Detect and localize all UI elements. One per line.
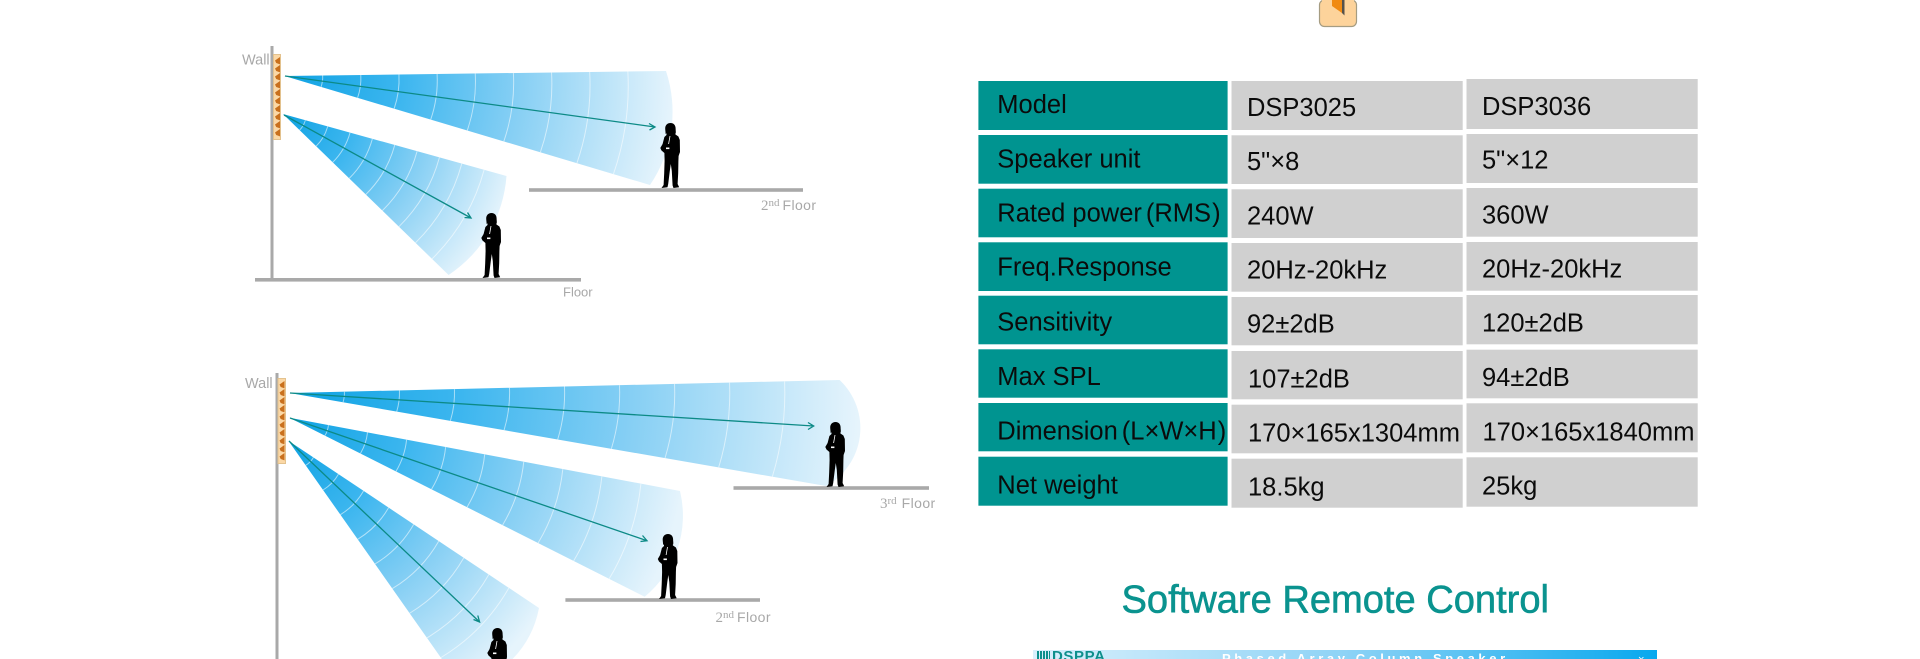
- row: dimension: Dimension(L×W×H): [997, 418, 1226, 446]
- row: frequency response: Freq.Response: [997, 254, 1172, 282]
- row: max SPL: [978, 349, 1698, 399]
- row: sensitivity: 92±2dB: [1247, 310, 1335, 338]
- floor line: [255, 278, 581, 282]
- second floor line: [529, 188, 803, 192]
- row: dimension: [978, 403, 1698, 453]
- row: frequency response: 20Hz-20kHz: [1482, 255, 1622, 283]
- row: model: Model: [997, 91, 1067, 119]
- row: rated power: 240W: [1247, 203, 1314, 231]
- label: 3rd floor: 3: [880, 496, 888, 512]
- label: 3rd floor: Floor: [902, 495, 936, 511]
- beam to second floor: [284, 71, 673, 185]
- beam to floor: [283, 114, 506, 275]
- wall line: [270, 46, 274, 280]
- label: 2nd floor: Floor: [782, 197, 816, 213]
- second floor line: [565, 598, 760, 602]
- beam to third floor: [289, 380, 860, 486]
- speaker column: [274, 54, 280, 140]
- row: rated power: Rated power(RMS): [997, 200, 1221, 228]
- logo dots: [1037, 651, 1050, 659]
- row: dimension: 170×165x1840mm: [1482, 419, 1694, 447]
- person on second floor: [658, 534, 678, 599]
- beam to floor: [288, 441, 539, 659]
- row: net weight: 18.5kg: [1248, 474, 1325, 502]
- label: wall: Wall: [245, 376, 273, 392]
- person on floor: [481, 213, 501, 278]
- label: floor: Floor: [563, 284, 593, 300]
- label: wall: Wall: [242, 52, 270, 68]
- person on floor, cut off by the page edge: [487, 628, 507, 659]
- person on second floor: [660, 123, 680, 188]
- row: net weight: 25kg: [1482, 472, 1537, 500]
- label: 2nd floor: Floor: [737, 609, 771, 625]
- diagram: two-floor coverage: [242, 46, 816, 300]
- wall line: [276, 373, 278, 659]
- diagram: three-floor coverage: [245, 373, 936, 659]
- row: speaker unit: 5"×8: [1247, 148, 1299, 176]
- person on third floor: [825, 422, 845, 487]
- row: sensitivity: Sensitivity: [997, 308, 1112, 336]
- software window title bar: [1033, 650, 1657, 659]
- row: max SPL: 94±2dB: [1482, 364, 1570, 392]
- label: 3rd floor: rd: [888, 495, 897, 507]
- row: max SPL: Max SPL: [997, 363, 1101, 391]
- row: rated power: [978, 188, 1698, 238]
- row: model: [978, 79, 1698, 130]
- row: sensitivity: 120±2dB: [1482, 310, 1584, 338]
- row: speaker unit: Speaker unit: [997, 146, 1140, 174]
- row: dimension: 170×165x1304mm: [1248, 420, 1460, 448]
- row: frequency response: [978, 242, 1698, 292]
- beam to second floor: [289, 418, 683, 597]
- label: 2nd floor: nd: [723, 609, 734, 621]
- icon: speaker: [1320, 0, 1356, 26]
- label: 2nd floor: 2: [761, 198, 768, 214]
- title: software remote control: Software Remote Control: [1122, 579, 1549, 622]
- row: net weight: [978, 457, 1698, 508]
- row: rated power: 360W: [1482, 201, 1549, 229]
- row: net weight: Net weight: [997, 471, 1118, 499]
- label: 2nd floor: 2: [716, 610, 723, 626]
- label: 2nd floor: nd: [768, 197, 780, 209]
- row: speaker unit: [978, 134, 1698, 184]
- row: sensitivity: [978, 295, 1698, 345]
- specification table: [978, 79, 1698, 508]
- row: model: DSP3036: [1482, 93, 1591, 121]
- row: speaker unit: 5"×12: [1482, 147, 1548, 175]
- row: frequency response: 20Hz-20kHz: [1247, 257, 1387, 285]
- row: model: DSP3025: [1247, 94, 1356, 122]
- third floor line: [734, 486, 929, 490]
- row: max SPL: 107±2dB: [1248, 365, 1350, 393]
- speaker column: [278, 378, 286, 464]
